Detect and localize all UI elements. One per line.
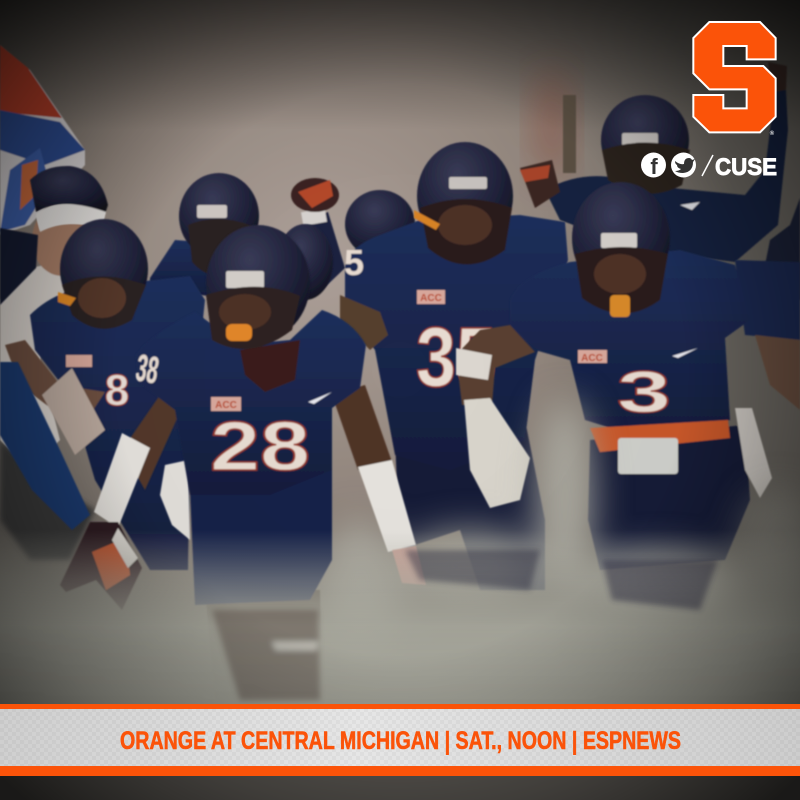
acc patch 3: ACC [581,353,603,364]
handle /CUSE: CUSE [715,154,777,181]
forearm 35 [340,295,388,350]
pants 35 [395,420,545,590]
back right player with raised arm [520,62,800,300]
banner flag at upper left [0,45,85,235]
number 35: 35 [416,310,496,404]
shorts 28 [190,465,332,605]
pants 3 [588,425,750,570]
hair and neck 28 [240,340,300,392]
right arm 28 [332,385,392,470]
helmet 28 [206,225,310,349]
shoulder number 28: 38 [133,347,162,393]
player number 28 in front [60,225,426,700]
icon: twitter [671,152,696,178]
white towel at waist [160,460,190,540]
jersey 35 [345,215,568,470]
acc patch 28: ACC [215,400,237,411]
acc patch 3 [578,350,607,364]
helmet 35 [414,142,513,265]
acc patch 35 [417,290,445,304]
logo: block S [693,22,776,132]
player number 3 at right [456,182,800,570]
raised fist [291,178,345,290]
dark legs at far left [0,440,95,560]
jersey number 28: 28 [210,407,310,485]
back player helmet behind number 35 [277,190,415,300]
number 3: 3 [617,360,671,425]
acc patch 28 [211,397,241,411]
icon: facebook: f [650,154,658,179]
player number 8 at left [5,219,205,570]
player number 8 at left: 8 [105,366,129,415]
waist belt [590,420,730,452]
far left blue sleeve [0,362,90,530]
social block and logo [641,22,777,181]
nike swoosh 3 [672,348,698,358]
back arm right [735,260,800,340]
jersey 3 [510,250,750,440]
coach in white at left [0,202,105,470]
leg remnant visible through fog [212,550,718,700]
player number 35 in the middle [340,142,568,590]
arm with wrist wrap [456,325,535,405]
left glove 28 [60,522,142,610]
helmet 3 [572,182,670,317]
back player helmet center-left [150,173,259,300]
bottom banner [0,704,800,776]
nike swoosh 28 [308,392,332,404]
shoulder number 35: 5 [344,242,364,283]
acc patch 35: ACC [420,293,442,304]
legs 28 [205,590,322,700]
back player far left [0,166,108,305]
left arm 28 [122,395,180,490]
icon: facebook [641,152,666,179]
low fog over legs [0,530,800,705]
fog column between players [320,400,800,660]
registered mark: ® [770,130,775,137]
jersey 28 [136,310,366,495]
